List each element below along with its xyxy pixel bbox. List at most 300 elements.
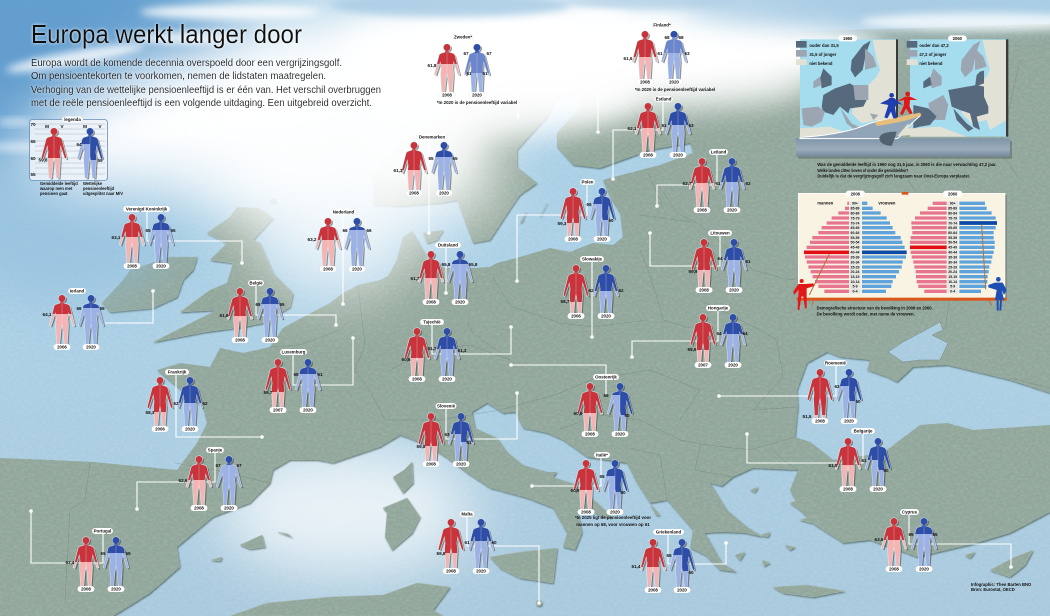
age labels 2008: 45-49 [851,246,860,250]
legend title: legenda [64,117,81,122]
map legends: ouder dan 31,5 [809,43,839,48]
values: 65 [908,532,914,537]
label: Zweden* [454,35,472,40]
values: 61 [715,181,721,186]
map caption [817,162,997,179]
pyramid caption: De bevolking wordt ouder, met name de vrouwen. [817,312,915,317]
figure blue 2020 [665,103,692,154]
pointers [809,225,992,305]
age labels 2008: 70-74 [851,221,860,225]
years [190,505,238,511]
values [803,384,861,419]
pyramid caption: Demografische structuur van de bevolking in 2008 en 2060. [817,305,933,310]
values: 61,3 [394,168,403,173]
panel: population pyramids [793,191,1007,317]
Sea of Azov [888,322,948,362]
years: 2008 [442,93,452,98]
values: 61 [657,51,663,56]
label: Tsjechië [423,320,441,325]
panel: Hongarije [688,305,748,368]
figure red 2007 [690,314,717,365]
label: Denemarken [419,135,445,140]
values [437,540,497,556]
label: Ierland [70,289,85,294]
icon: red presenter [793,279,814,310]
legend scale: V [98,124,102,129]
values: 60 [491,540,497,545]
age labels 2060: 60-64 [948,231,957,235]
legend caption blue: Wettelijke [83,181,103,186]
years: 2020 [455,300,465,305]
years [696,287,742,293]
values: 65 [170,228,176,233]
years [644,587,690,593]
years [124,263,170,269]
values: 63 [688,123,694,128]
values: 61,4 [632,564,641,569]
figure red 2008 [73,537,100,588]
label: Griekenland [656,530,681,535]
islands: Balearic [211,532,292,561]
values: 63 [444,432,450,437]
gender labels: mannen [817,200,834,205]
map caption: Duidelijk is dat de vergrijzingsgolf zich langzaam naar Oost-Europa verplaatst. [817,174,970,179]
credits: Infographic: Theo Barten BNO [971,582,1032,587]
age labels 2060 [947,201,958,294]
figure red 2008 [227,288,254,339]
label: Roemenië [825,361,847,366]
figure red 2008 [635,103,662,154]
highlighted cohort 2008 men [804,247,849,258]
figure blue 2020 [468,519,495,570]
panel: Finland [624,22,715,92]
values: 63 [684,51,690,56]
age labels 2060: 20-24 [948,270,957,274]
years: 2008 [323,267,333,272]
years: 2006 [155,427,165,432]
footnote: *In 2025 ligt de pensioenleeftijd voor [575,515,651,520]
values: 60 [608,218,614,223]
values: 64 [717,256,723,261]
years: 2020 [265,338,275,343]
label: Portugal [94,529,111,534]
age labels 2008: 5-9 [852,285,858,289]
values: 65 [255,302,261,307]
values: 62 [745,181,751,186]
legend scale [30,122,102,177]
values: 64 [716,331,722,336]
credits: Bron: Eurostat, OECD [971,587,1015,592]
map 1960 [800,39,898,137]
values: 61,6 [220,313,229,318]
figure red 2008 [835,438,862,489]
age labels 2060: 70-74 [948,221,957,225]
figure blue 2020 [719,158,746,209]
legend scale: 55 [30,172,36,177]
title: Europa werkt langer door [31,19,302,49]
years: 2008 [412,377,422,382]
values: 66 [366,228,372,233]
figure red 2008 [418,413,445,464]
figure red 2008 [881,518,908,569]
years: 2020 [669,80,679,85]
figure red 2008 [438,519,465,570]
legend figure blue [77,128,104,179]
board [797,192,1007,301]
island: Ireland [102,257,197,312]
intro text [31,58,381,109]
years: 2020 [456,462,466,467]
values: 61 [745,259,751,264]
years: 2008 [640,80,650,85]
years [578,509,624,515]
figure red 2008 [640,539,667,590]
icon: blue presenter [988,277,1007,311]
panel: Nederland [308,209,372,272]
values [624,35,690,61]
panel: Luxemburg [264,349,323,413]
years: 2008 [648,588,658,593]
pyramid 2008 men [805,203,849,291]
values: 59,9 [689,269,698,274]
age labels 2008: 10-14 [851,280,860,284]
values [179,463,242,483]
figure blue 2020 [103,537,130,588]
values: 65 [99,306,105,311]
figure red 2008 [434,44,461,95]
figure blue 2020 [589,188,616,239]
legend values: 64 [76,142,82,147]
map legends: 31,5 of jonger [809,52,837,57]
icon: red surfer [897,92,917,115]
values: 60 [855,399,861,404]
age labels 2008: 60-64 [851,231,860,235]
label: Verenigd Koninkrijk [126,207,168,212]
figure red 2008 [418,251,445,302]
figure blue 2020 [148,214,175,265]
age labels 2060: 75-79 [948,216,957,220]
years: 2008 [568,237,578,242]
values: 65 [428,156,434,161]
values: 61 [466,440,472,445]
islands: Baltic and Danish [270,198,770,566]
figure red 2006 [49,295,76,346]
label: Frankrijk [168,370,187,375]
values: 65,8 [442,262,451,267]
values: 58,7 [561,299,570,304]
figure red 2007 [265,359,292,410]
years: 2020 [673,153,683,158]
years: 2020 [597,237,607,242]
values: 67 [236,463,242,468]
panel: Malta [437,511,497,574]
figure blue 2020 [448,413,475,464]
years: 2020 [728,363,738,368]
age labels 2060: 80-84 [948,211,957,215]
map caption: Was de gemiddelde leeftijd in 1960 nog 31,5 jaar, in 2060 is die naar verwachting 47,2 jaar. [817,162,997,167]
panel: Estland [628,96,694,158]
figure blue 2020 [720,314,747,365]
years: 2020 [86,345,96,350]
figure blue 2020 [257,288,284,339]
label: Litouwen [710,231,730,236]
islands: Aegean [650,473,975,560]
values [632,553,694,575]
figure blue 2020 [721,239,748,290]
legend scale: 65 [30,139,36,144]
year pills [838,35,967,41]
values [417,432,472,449]
figure red 2008 [632,31,659,82]
year pills: 2008 [851,192,861,197]
values: 64,1 [43,312,52,317]
year pills [846,191,962,197]
values: 60,9 [574,411,583,416]
years: 2007 [273,408,283,413]
legend caption red [39,181,78,196]
figure blue 2020 [78,295,105,346]
values: 63,5 [875,537,884,542]
figure red 2008 [691,239,718,290]
age labels 2060: 0-4 [950,290,955,294]
values: 61,6 [624,56,633,61]
values: 65 [586,202,592,207]
years: 2020 [442,377,452,382]
figure blue 2020 [661,31,688,82]
values: 60 [624,413,630,418]
label: Luxemburg [282,350,306,355]
values [308,228,372,242]
values: 58,3 [146,410,155,415]
years: 2008 [81,587,91,592]
gender labels: vrouwen [878,200,896,205]
age labels 2060: 10-14 [948,280,957,284]
figure red 2008 [315,218,342,269]
values: 62,4 [66,560,75,565]
values: 68 [678,35,684,40]
panel: Letland [683,149,751,213]
panel: Oostenrijk [574,374,634,437]
map legends: niet bekend [919,61,943,66]
years: 2020 [185,427,195,432]
values: 62,1 [628,126,637,131]
panel: Verenigd Koninkrijk [112,206,176,269]
years [438,92,486,98]
values [574,393,630,418]
age labels 2008: 30-34 [851,260,860,264]
age labels 2008: 55-59 [851,236,860,240]
label: Polen [582,180,594,185]
values: 62 [588,288,594,293]
age labels 2008: 50-54 [851,241,860,245]
figure red 2006 [563,265,590,316]
years [694,362,742,368]
footnote: *In 2020 is de pensioenleeftijd variabel [635,87,715,92]
values [683,181,751,186]
age labels 2008: 80-84 [851,211,860,215]
years [812,418,858,424]
values: 60 [688,570,694,575]
values: 61,7 [428,346,437,351]
years [320,266,366,272]
values [628,123,694,131]
figure red 2008 [573,460,600,511]
legend scale: M [45,124,49,129]
values: 60 [883,468,889,473]
label: België [249,281,263,286]
age labels 2008: 0-4 [852,290,858,294]
values [43,306,105,317]
years [568,313,614,319]
values: 65 [125,551,131,556]
years: 2020 [727,208,737,213]
figure blue 2020 [865,438,892,489]
year pills: 2060 [948,192,958,197]
years [422,461,470,467]
label: Finland* [653,23,671,28]
figure blue 2020 [593,265,620,316]
years: 2020 [156,264,166,269]
credits [971,582,1032,592]
legend scale: 60 [30,156,36,161]
years: 2008 [194,506,204,511]
pyramid 2060 men [910,203,947,291]
values: 65,8 [469,262,478,267]
values: 67 [215,463,221,468]
years [232,337,278,343]
values: 61 [661,123,667,128]
panel: Spanje [179,447,243,511]
label: Estland [656,97,672,102]
figure blue 2020 [607,383,634,434]
years [582,431,628,437]
values [875,532,938,542]
label: Bulgarije [854,429,873,434]
years: 2020 [303,408,313,413]
age labels 2060: 50-54 [948,241,957,245]
values: 61,5 [829,463,838,468]
sky and clouds [0,0,1050,300]
map caption: Welke landen zitten boven of onder die gemiddelden? [817,168,909,173]
legend caption blue [83,181,123,196]
values: 59,3 [558,221,567,226]
island: Cyprus [990,550,1033,577]
age labels 2060: 65-69 [948,226,957,230]
values [689,256,751,274]
panel: Cyprus [875,509,938,572]
years: 2020 [844,419,854,424]
values [561,288,624,304]
island: Crete [773,585,845,597]
age labels 2060: 5-9 [950,285,955,289]
values [428,51,492,76]
age labels 2008: 40-44 [851,251,860,255]
wave slab [796,116,1012,159]
years: 2020 [439,191,449,196]
years [636,79,682,85]
age labels 2008: 15-19 [851,275,860,279]
years: 2020 [472,93,482,98]
legend values: 59 [97,158,103,163]
age labels 2008: 85-89 [851,207,860,211]
figure blue 2020 [447,251,474,302]
figure red 2008 [807,369,834,420]
years [78,586,124,592]
values: 65 [932,532,938,537]
sea brightening in the Mediterranean [215,445,475,575]
panel: Denemarken [394,134,458,196]
values: 63 [834,384,840,389]
values: 63,1 [112,235,121,240]
age labels 2008: 90+ [852,202,858,206]
legend scale: 70 [30,122,36,127]
age labels 2008: 35-39 [851,255,860,259]
figure red 2008 [186,456,213,507]
panel: Roemenië [803,360,863,424]
label: Cyprus [902,510,918,515]
legend caption red: pensioen gaat [40,191,68,196]
values [402,346,467,362]
label: Nederland [333,210,355,215]
age labels 2060: 85-89 [948,207,957,211]
values: 65 [603,393,609,398]
values [66,551,131,565]
panel: Duitsland [411,242,478,305]
values: 65 [279,302,285,307]
years: 2008 [843,487,853,492]
figure blue 2020 [344,218,371,269]
panel: België [220,280,285,343]
figure red 2008 [560,188,587,239]
values [571,474,626,495]
values: 62 [618,288,624,293]
values: 61 [317,372,323,377]
years: 2020 [873,487,883,492]
panel: Griekenland [632,529,696,593]
values: 59,7 [264,390,273,395]
values [829,458,889,473]
figure blue 2020 [216,456,243,507]
age labels 2060: 90+ [950,202,956,206]
years: 2020 [111,587,121,592]
pyramid 2060 women [959,203,996,291]
figure blue 2020 [602,460,629,511]
years: 2006 [57,345,67,350]
values: 58,9 [688,347,697,352]
years: 2008 [426,462,436,467]
icon: blue surfer [880,93,903,118]
legend caption blue: uitgesplitst naar M/V [83,191,123,196]
years [694,207,740,213]
values: 63,2 [308,237,317,242]
years: 2020 [615,432,625,437]
years: 2008 [699,288,709,293]
label: Letland [711,150,727,155]
figure red 2008 [689,158,716,209]
label: Malta [461,512,473,517]
map legends: niet bekend [809,61,833,66]
figure red 2008 [404,328,431,379]
years [640,152,686,158]
panel: average age maps [796,35,1012,179]
values: 61,8 [428,63,437,68]
age labels 2060: 25-29 [948,265,957,269]
legend panel [30,116,123,196]
age labels 2060: 40-44 [948,251,957,255]
values: 61,3 [458,348,467,353]
age labels 2060: 30-34 [948,260,957,264]
values [688,331,748,352]
